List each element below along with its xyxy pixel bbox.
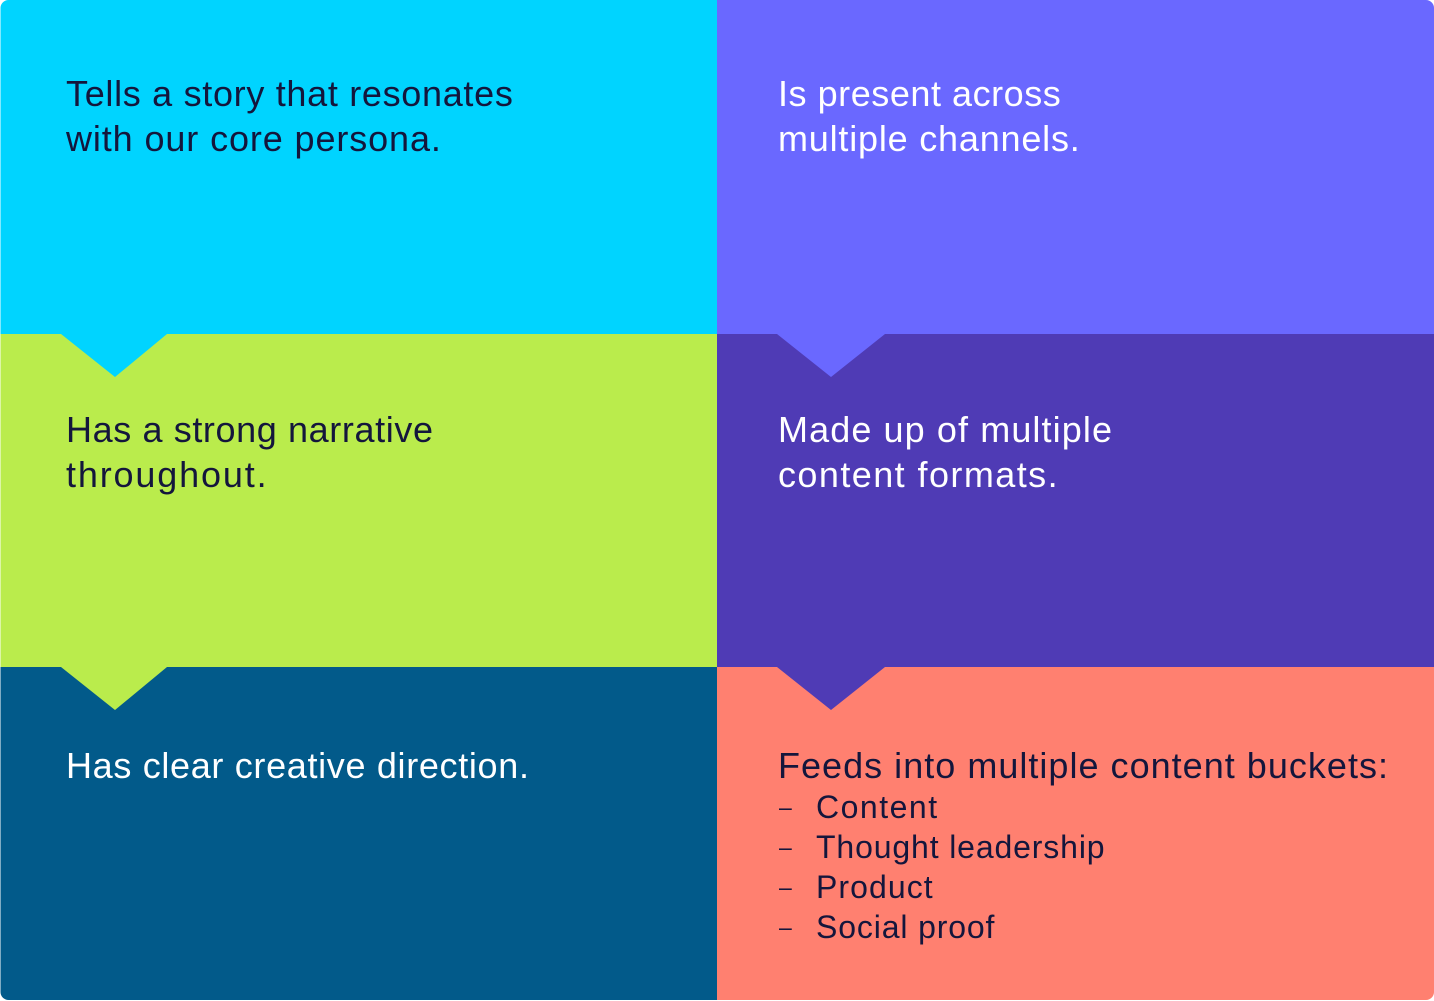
text: cyan panel: Tells a story that resonates bbox=[66, 73, 514, 114]
text: cyan panel bbox=[66, 73, 514, 159]
text: lime panel: throughout. bbox=[66, 454, 268, 495]
list: content buckets: – bbox=[779, 874, 792, 900]
list: content buckets bbox=[779, 789, 1105, 945]
list: content buckets: – bbox=[779, 794, 792, 820]
panel: coral bbox=[717, 667, 1434, 1000]
list: content buckets: Social proof bbox=[816, 909, 995, 945]
text: deep purple panel: content formats. bbox=[778, 454, 1059, 495]
panel: violet bbox=[717, 0, 1434, 377]
text: violet panel: multiple channels. bbox=[778, 118, 1081, 159]
text: deep purple panel: Made up of multiple bbox=[778, 409, 1113, 450]
text: dark blue panel: Has clear creative direction. bbox=[66, 745, 530, 786]
panel: dark blue bbox=[0, 667, 717, 1000]
text: deep purple panel bbox=[778, 409, 1113, 495]
panel: cyan bbox=[0, 0, 717, 377]
text: cyan panel: with our core persona. bbox=[66, 118, 442, 159]
text: violet panel bbox=[778, 73, 1081, 159]
list: content buckets: Product bbox=[816, 869, 934, 905]
text: violet panel: Is present across bbox=[778, 73, 1061, 114]
text: coral panel heading: Feeds into multiple content buckets: bbox=[778, 745, 1389, 786]
text: lime panel: Has a strong narrative bbox=[66, 409, 434, 450]
list: content buckets: Thought leadership bbox=[816, 829, 1105, 865]
list: content buckets: Content bbox=[816, 789, 939, 825]
list: content buckets: – bbox=[779, 834, 792, 860]
text: lime panel bbox=[66, 409, 434, 495]
panel: deep purple bbox=[717, 334, 1434, 710]
list: content buckets: – bbox=[779, 914, 792, 940]
panel: lime bbox=[0, 334, 717, 710]
